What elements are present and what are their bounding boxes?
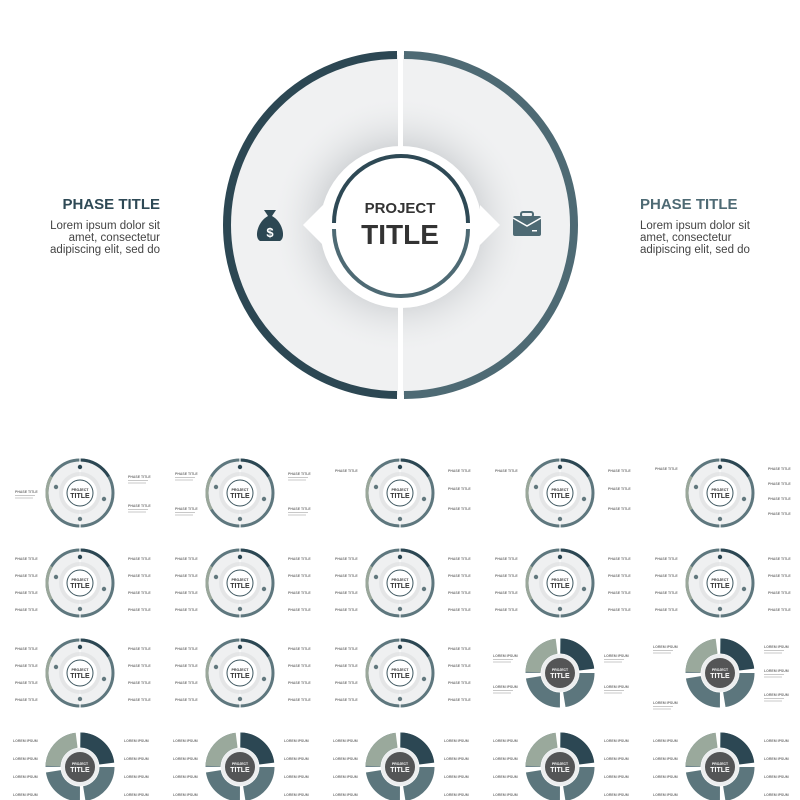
main diagram xyxy=(227,48,574,403)
row 3: LOREM IPSUM xyxy=(653,645,678,649)
row 4: LOREM IPSUM xyxy=(764,793,789,797)
row 1 xyxy=(15,458,791,528)
row 1: PHASE TITLE xyxy=(128,504,151,508)
row 3: PHASE TITLE xyxy=(448,698,471,702)
row 4: LOREM IPSUM xyxy=(493,793,518,797)
row 3: PHASE TITLE xyxy=(448,664,471,668)
row 2: PHASE TITLE xyxy=(495,608,518,612)
row 3: PHASE TITLE xyxy=(175,698,198,702)
row 3: LOREM IPSUM xyxy=(764,669,789,673)
row 4: LOREM IPSUM xyxy=(653,739,678,743)
row 3: LOREM IPSUM xyxy=(493,654,518,658)
row 4: LOREM IPSUM xyxy=(493,757,518,761)
row 2: PHASE TITLE xyxy=(655,591,678,595)
row 2: PHASE TITLE xyxy=(15,608,38,612)
row 4: LOREM IPSUM xyxy=(333,739,358,743)
row 4: LOREM IPSUM xyxy=(764,757,789,761)
row 4: LOREM IPSUM xyxy=(653,793,678,797)
right phase text: adipiscing elit, sed do xyxy=(640,244,750,256)
row 1: PHASE TITLE xyxy=(608,507,631,511)
row 2: PHASE TITLE xyxy=(335,591,358,595)
row 3: PHASE TITLE xyxy=(175,647,198,651)
row 4: LOREM IPSUM xyxy=(444,793,469,797)
row 2: PHASE TITLE xyxy=(448,591,471,595)
row 2: PHASE TITLE xyxy=(608,574,631,578)
row 3: PHASE TITLE xyxy=(175,681,198,685)
row 4: LOREM IPSUM xyxy=(604,757,629,761)
row 4: LOREM IPSUM xyxy=(13,793,38,797)
row 4: LOREM IPSUM xyxy=(173,793,198,797)
right ring arc xyxy=(404,55,574,395)
row 4: LOREM IPSUM xyxy=(13,757,38,761)
row 1: PHASE TITLE xyxy=(175,472,198,476)
row 2: PHASE TITLE xyxy=(128,608,151,612)
row 3: PHASE TITLE xyxy=(335,664,358,668)
row 4: LOREM IPSUM xyxy=(124,739,149,743)
row 3: PHASE TITLE xyxy=(335,647,358,651)
center badge: TITLE xyxy=(361,219,439,250)
row 2: PHASE TITLE xyxy=(448,557,471,561)
row 3: PHASE TITLE xyxy=(448,647,471,651)
row 1: PHASE TITLE xyxy=(608,487,631,491)
right phase text xyxy=(640,196,751,256)
row 3: PHASE TITLE xyxy=(288,664,311,668)
row 2: PHASE TITLE xyxy=(448,608,471,612)
row 2: PHASE TITLE xyxy=(175,557,198,561)
row 1: PHASE TITLE xyxy=(15,490,38,494)
thumbnail grid xyxy=(13,458,791,797)
row 3: PHASE TITLE xyxy=(15,681,38,685)
row 4: LOREM IPSUM xyxy=(333,793,358,797)
left phase text: Lorem ipsum dolor sit xyxy=(50,220,161,232)
row 2: PHASE TITLE xyxy=(15,557,38,561)
row 1: PHASE TITLE xyxy=(448,469,471,473)
icon: money bag xyxy=(257,210,283,241)
row 2: PHASE TITLE xyxy=(495,574,518,578)
row 2: PHASE TITLE xyxy=(768,591,791,595)
row 4: LOREM IPSUM xyxy=(284,775,309,779)
row 2: PHASE TITLE xyxy=(655,608,678,612)
row 2: PHASE TITLE xyxy=(495,591,518,595)
right phase text: amet, consectetur xyxy=(640,232,732,244)
row 3: PHASE TITLE xyxy=(335,681,358,685)
left ring arc xyxy=(227,55,397,395)
right phase text: PHASE TITLE xyxy=(640,196,738,213)
icon: money bag: $ xyxy=(266,225,274,240)
row 3: PHASE TITLE xyxy=(15,664,38,668)
row 4: LOREM IPSUM xyxy=(604,793,629,797)
row 1: PHASE TITLE xyxy=(495,469,518,473)
row 2: PHASE TITLE xyxy=(288,591,311,595)
row 2: PHASE TITLE xyxy=(15,591,38,595)
row 2: PHASE TITLE xyxy=(768,574,791,578)
row 2: PHASE TITLE xyxy=(335,557,358,561)
row 2: PHASE TITLE xyxy=(288,557,311,561)
row 3 xyxy=(15,638,789,710)
row 2: PHASE TITLE xyxy=(128,557,151,561)
row 4: LOREM IPSUM xyxy=(124,775,149,779)
row 1: PHASE TITLE xyxy=(655,467,678,471)
row 4: LOREM IPSUM xyxy=(444,775,469,779)
row 3: PHASE TITLE xyxy=(128,698,151,702)
row 2: PHASE TITLE xyxy=(288,608,311,612)
center badge: PROJECT xyxy=(365,200,435,217)
row 2: PHASE TITLE xyxy=(175,574,198,578)
row 3: PHASE TITLE xyxy=(128,647,151,651)
left phase text: adipiscing elit, sed do xyxy=(50,244,160,256)
row 4: LOREM IPSUM xyxy=(284,757,309,761)
row 4: LOREM IPSUM xyxy=(124,793,149,797)
row 4: LOREM IPSUM xyxy=(604,775,629,779)
left phase text: amet, consectetur xyxy=(69,232,160,244)
row 4: LOREM IPSUM xyxy=(653,757,678,761)
row 2: PHASE TITLE xyxy=(128,591,151,595)
row 3: LOREM IPSUM xyxy=(493,685,518,689)
row 3: PHASE TITLE xyxy=(335,698,358,702)
icon: briefcase xyxy=(513,212,541,236)
row 2: PHASE TITLE xyxy=(608,608,631,612)
left phase text xyxy=(50,196,161,256)
center badge xyxy=(303,146,500,308)
row 2: PHASE TITLE xyxy=(288,574,311,578)
row 4: LOREM IPSUM xyxy=(493,775,518,779)
row 2: PHASE TITLE xyxy=(608,591,631,595)
row 2 xyxy=(15,548,791,618)
row 2: PHASE TITLE xyxy=(175,591,198,595)
row 4: LOREM IPSUM xyxy=(333,757,358,761)
row 1: PHASE TITLE xyxy=(768,497,791,501)
row 2: PHASE TITLE xyxy=(768,557,791,561)
row 3: PHASE TITLE xyxy=(175,664,198,668)
row 3: PHASE TITLE xyxy=(288,647,311,651)
row 4: LOREM IPSUM xyxy=(653,775,678,779)
row 2: PHASE TITLE xyxy=(335,574,358,578)
row 1: PHASE TITLE xyxy=(335,469,358,473)
row 4: LOREM IPSUM xyxy=(604,739,629,743)
row 4: LOREM IPSUM xyxy=(13,739,38,743)
row 3: LOREM IPSUM xyxy=(764,645,789,649)
row 3: PHASE TITLE xyxy=(448,681,471,685)
row 2: PHASE TITLE xyxy=(175,608,198,612)
row 1: PHASE TITLE xyxy=(288,507,311,511)
row 4: LOREM IPSUM xyxy=(173,757,198,761)
row 1: PHASE TITLE xyxy=(448,507,471,511)
row 4: LOREM IPSUM xyxy=(124,757,149,761)
row 1: PHASE TITLE xyxy=(288,472,311,476)
row 4: LOREM IPSUM xyxy=(173,739,198,743)
row 2: PHASE TITLE xyxy=(128,574,151,578)
row 3: LOREM IPSUM xyxy=(653,701,678,705)
row 4 xyxy=(13,739,789,797)
row 3: PHASE TITLE xyxy=(15,647,38,651)
row 4: LOREM IPSUM xyxy=(444,739,469,743)
row 4: LOREM IPSUM xyxy=(444,757,469,761)
row 4: LOREM IPSUM xyxy=(493,739,518,743)
row 1: PHASE TITLE xyxy=(768,512,791,516)
row 1: PHASE TITLE xyxy=(768,467,791,471)
row 4: LOREM IPSUM xyxy=(764,739,789,743)
row 3: PHASE TITLE xyxy=(288,681,311,685)
row 3: LOREM IPSUM xyxy=(764,693,789,697)
row 2: PHASE TITLE xyxy=(655,574,678,578)
row 3: LOREM IPSUM xyxy=(604,654,629,658)
row 2: PHASE TITLE xyxy=(335,608,358,612)
row 1: PHASE TITLE xyxy=(448,487,471,491)
row 4: LOREM IPSUM xyxy=(173,775,198,779)
row 3: PHASE TITLE xyxy=(128,664,151,668)
row 4: LOREM IPSUM xyxy=(13,775,38,779)
row 2: PHASE TITLE xyxy=(608,557,631,561)
row 2: PHASE TITLE xyxy=(495,557,518,561)
row 4: LOREM IPSUM xyxy=(333,775,358,779)
row 3: PHASE TITLE xyxy=(128,681,151,685)
row 3: LOREM IPSUM xyxy=(604,685,629,689)
row 2: PHASE TITLE xyxy=(15,574,38,578)
row 2: PHASE TITLE xyxy=(768,608,791,612)
row 3: PHASE TITLE xyxy=(15,698,38,702)
row 2: PHASE TITLE xyxy=(448,574,471,578)
left phase text: PHASE TITLE xyxy=(62,196,160,213)
row 4: LOREM IPSUM xyxy=(284,739,309,743)
row 3: PHASE TITLE xyxy=(288,698,311,702)
row 1: PHASE TITLE xyxy=(175,507,198,511)
right phase text: Lorem ipsum dolor sit xyxy=(640,220,751,232)
row 2: PHASE TITLE xyxy=(655,557,678,561)
row 1: PHASE TITLE xyxy=(768,482,791,486)
row 4: LOREM IPSUM xyxy=(284,793,309,797)
row 1: PHASE TITLE xyxy=(128,475,151,479)
row 1: PHASE TITLE xyxy=(608,469,631,473)
row 4: LOREM IPSUM xyxy=(764,775,789,779)
